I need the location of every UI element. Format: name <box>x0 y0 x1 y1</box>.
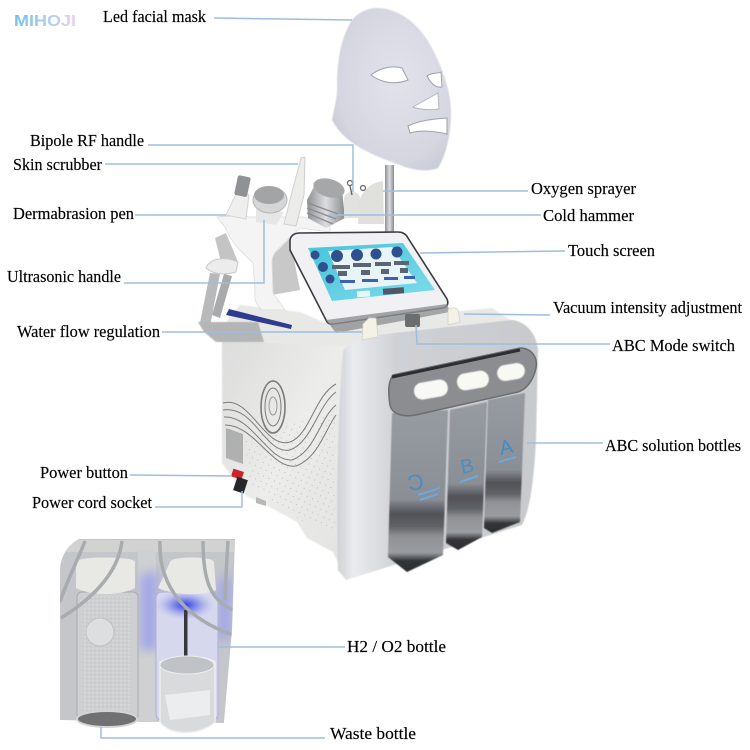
side panel <box>222 340 345 576</box>
collar and cable handles <box>215 233 238 266</box>
mouth <box>408 118 447 134</box>
skin scrubber <box>284 157 305 226</box>
bottle letters: A <box>497 435 516 460</box>
screen <box>308 243 435 301</box>
leader: water flow <box>162 331 362 333</box>
label: Dermabrasion pen: Dermabrasion pen <box>13 204 134 223</box>
mask <box>332 8 451 170</box>
label: Power button: Power button <box>40 463 128 482</box>
white top shelf <box>222 305 510 347</box>
leader: cord socket <box>155 491 242 507</box>
bipole RF handle <box>344 180 360 218</box>
leader: H2/O2 <box>218 646 345 648</box>
ultrasonic handle <box>253 186 287 225</box>
leader: ABC bottles <box>527 442 603 444</box>
leader: ABC mode <box>416 325 610 344</box>
right bottle <box>155 558 218 732</box>
bottle letters: B <box>458 455 476 479</box>
leader: touch screen <box>420 251 565 253</box>
leader: dermabrasion <box>135 214 226 216</box>
label: Vacuum intensity adjustment: Vacuum intensity adjustment <box>553 298 742 317</box>
cold hammer <box>307 175 347 228</box>
rating label <box>226 428 243 464</box>
connector hose <box>198 322 264 342</box>
label: ABC Mode switch: ABC Mode switch <box>612 336 736 355</box>
leader: led mask <box>214 18 352 20</box>
power cord socket <box>233 477 248 494</box>
leader: cold hammer <box>328 214 541 216</box>
tablet base <box>326 304 450 333</box>
photo background <box>55 535 240 723</box>
label: Waste bottle: Waste bottle <box>330 724 416 743</box>
LED facial mask device <box>332 8 451 233</box>
label: Cold hammer: Cold hammer <box>543 206 635 225</box>
leader: bipole RF <box>148 145 353 192</box>
touch screen tablet <box>290 232 450 333</box>
bottle letters: C <box>405 468 426 496</box>
oxygen sprayer <box>358 181 384 224</box>
label: Water flow regulation: Water flow regulation <box>17 322 160 341</box>
leader: skin scrubber <box>105 163 298 165</box>
logo: MIHOJI <box>14 13 76 30</box>
label: Ultrasonic handle: Ultrasonic handle <box>7 267 121 286</box>
label: ABC solution bottles: ABC solution bottles <box>605 436 741 455</box>
swirl emblem and wave lines <box>223 381 336 466</box>
foot <box>256 497 266 506</box>
mode switch <box>405 314 420 327</box>
nose <box>413 93 439 110</box>
leader: power button <box>130 475 232 476</box>
leader: oxygen <box>383 190 528 192</box>
leader: ultrasonic <box>124 220 264 283</box>
front panel <box>337 320 538 580</box>
left eye <box>371 67 408 83</box>
silicone tubes <box>60 541 233 635</box>
dermabrasion pen <box>226 175 251 219</box>
bottle photo <box>55 535 240 732</box>
bottle C <box>388 410 448 572</box>
right eye <box>427 72 442 87</box>
blue strip <box>226 309 292 329</box>
bottle B <box>446 402 487 550</box>
leader: waste <box>101 727 325 738</box>
cap window <box>389 348 536 416</box>
blue glow <box>140 570 232 650</box>
bottle caps <box>413 362 526 401</box>
power button <box>231 469 244 480</box>
label: Skin scrubber: Skin scrubber <box>13 155 102 174</box>
leader lines <box>101 18 610 738</box>
left bottle <box>76 558 138 727</box>
label: Power cord socket: Power cord socket <box>32 493 152 512</box>
machine body <box>222 320 538 580</box>
label: H2 / O2 bottle: H2 / O2 bottle <box>347 637 446 656</box>
vacuum and water flow knobs <box>362 308 460 340</box>
handle stand <box>198 216 330 342</box>
label: Bipole RF handle: Bipole RF handle <box>30 131 144 150</box>
arch shadow <box>270 238 300 295</box>
label: Oxygen sprayer: Oxygen sprayer <box>531 179 637 198</box>
leader: vacuum <box>464 314 550 315</box>
bottle letters <box>405 435 516 500</box>
label: Led facial mask: Led facial mask <box>103 7 207 26</box>
support pole <box>385 165 394 233</box>
dotted texture <box>245 410 335 530</box>
bottle A <box>484 393 525 533</box>
label: Touch screen: Touch screen <box>568 241 655 260</box>
